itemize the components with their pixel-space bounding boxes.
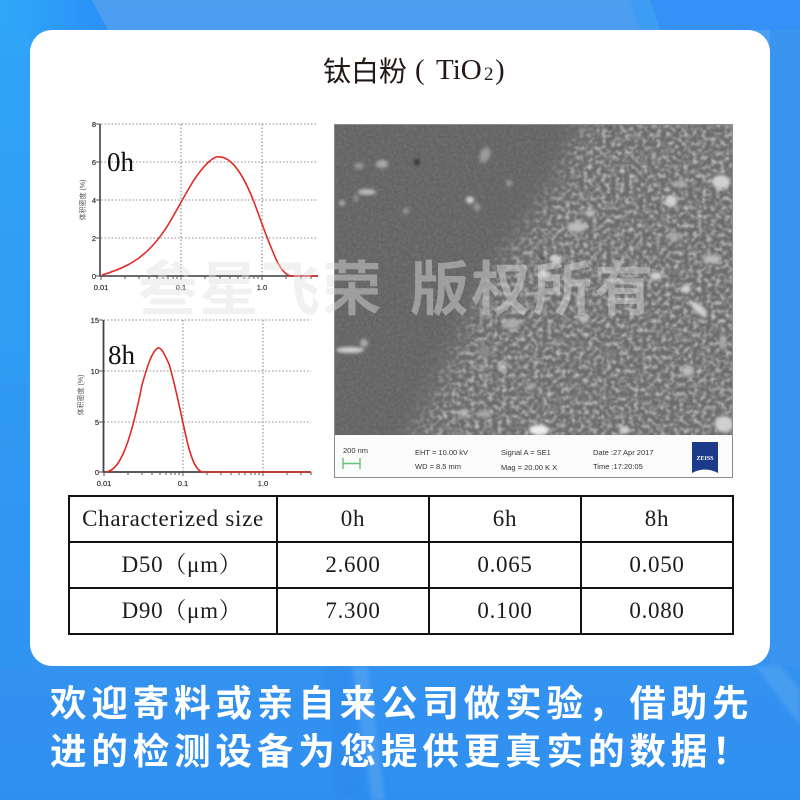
micrograph: SEM image with caption bar: 200 nm: [343, 446, 368, 455]
chart: particle size distribution at 8h: 15: [91, 316, 99, 325]
call to action line 1: 欢迎寄料或亲自来公司做实验，借助先: [50, 674, 753, 727]
chart: particle size distribution at 0h: 0: [92, 272, 96, 281]
title: [323, 50, 505, 90]
chart: particle size distribution at 8h: 0.01: [97, 479, 111, 488]
micrograph: SEM image with caption bar: Time :17:20:05: [593, 462, 643, 471]
chart: particle size distribution at 0h: 体积密度 (%): [78, 180, 87, 220]
data table: characterized size: 0.100: [477, 598, 533, 623]
chart: particle size distribution at 8h: 5: [95, 418, 99, 427]
chart: particle size distribution at 0h: [78, 120, 318, 292]
chart: particle size distribution at 0h: 8: [92, 120, 96, 129]
data table: characterized size: D90（μm）: [122, 598, 242, 623]
title: 2: [484, 64, 494, 85]
data table: characterized size: 0h: [341, 506, 365, 531]
data table: characterized size: [68, 495, 734, 635]
chart: particle size distribution at 0h: 0h: [107, 147, 134, 177]
chart: particle size distribution at 0h: 6: [92, 158, 96, 167]
chart: particle size distribution at 8h: 8h: [108, 340, 136, 370]
title: ): [495, 54, 505, 86]
data table: characterized size: D50（μm）: [122, 552, 242, 577]
title: 钛白粉: [323, 50, 407, 90]
micrograph: SEM image with caption bar: WD = 8.5 mm: [415, 462, 461, 471]
data table: characterized size: 0.080: [629, 598, 685, 623]
chart: particle size distribution at 0h: 4: [92, 196, 96, 205]
chart: particle size distribution at 8h: [76, 316, 312, 488]
micrograph: SEM image with caption bar: ZEISS: [696, 456, 714, 462]
chart: particle size distribution at 0h: 0.1: [176, 283, 186, 292]
data table: characterized size: 0.065: [477, 552, 533, 577]
data table: characterized size: 0.050: [629, 552, 685, 577]
chart: particle size distribution at 0h: 2: [92, 234, 96, 243]
chart: particle size distribution at 0h: 1.0: [257, 283, 267, 292]
data table: characterized size: Characterized size: [82, 506, 264, 531]
micrograph: SEM image with caption bar: Mag = 20.00 K X: [501, 463, 557, 472]
chart: particle size distribution at 8h: 0.1: [178, 479, 188, 488]
data table: characterized size: 7.300: [325, 598, 381, 623]
chart: particle size distribution at 8h: 1.0: [258, 479, 268, 488]
micrograph: SEM image with caption bar: Signal A = SE1: [501, 448, 551, 457]
micrograph: SEM image with caption bar: EHT = 10.00 kV: [415, 448, 468, 457]
data table: characterized size: 6h: [493, 506, 517, 531]
call to action text: [50, 674, 753, 775]
micrograph: SEM image with caption bar: [334, 124, 733, 478]
chart: particle size distribution at 8h: 0: [95, 468, 99, 477]
panel: white card: [30, 30, 770, 666]
chart: particle size distribution at 8h: 体积密度 (%): [76, 375, 85, 415]
data table: characterized size: 2.600: [325, 552, 381, 577]
call to action line 2: 进的检测设备为您提供更真实的数据！: [50, 722, 753, 775]
chart: particle size distribution at 8h: 10: [91, 367, 99, 376]
chart: particle size distribution at 0h: 0.01: [94, 283, 108, 292]
data table: characterized size: 8h: [645, 506, 669, 531]
micrograph: SEM image with caption bar: Date :27 Apr 2017: [593, 448, 653, 457]
watermark: 叁星飞荣 版权所有: [138, 242, 656, 327]
title: (: [415, 54, 425, 86]
title: TiO: [436, 54, 482, 86]
